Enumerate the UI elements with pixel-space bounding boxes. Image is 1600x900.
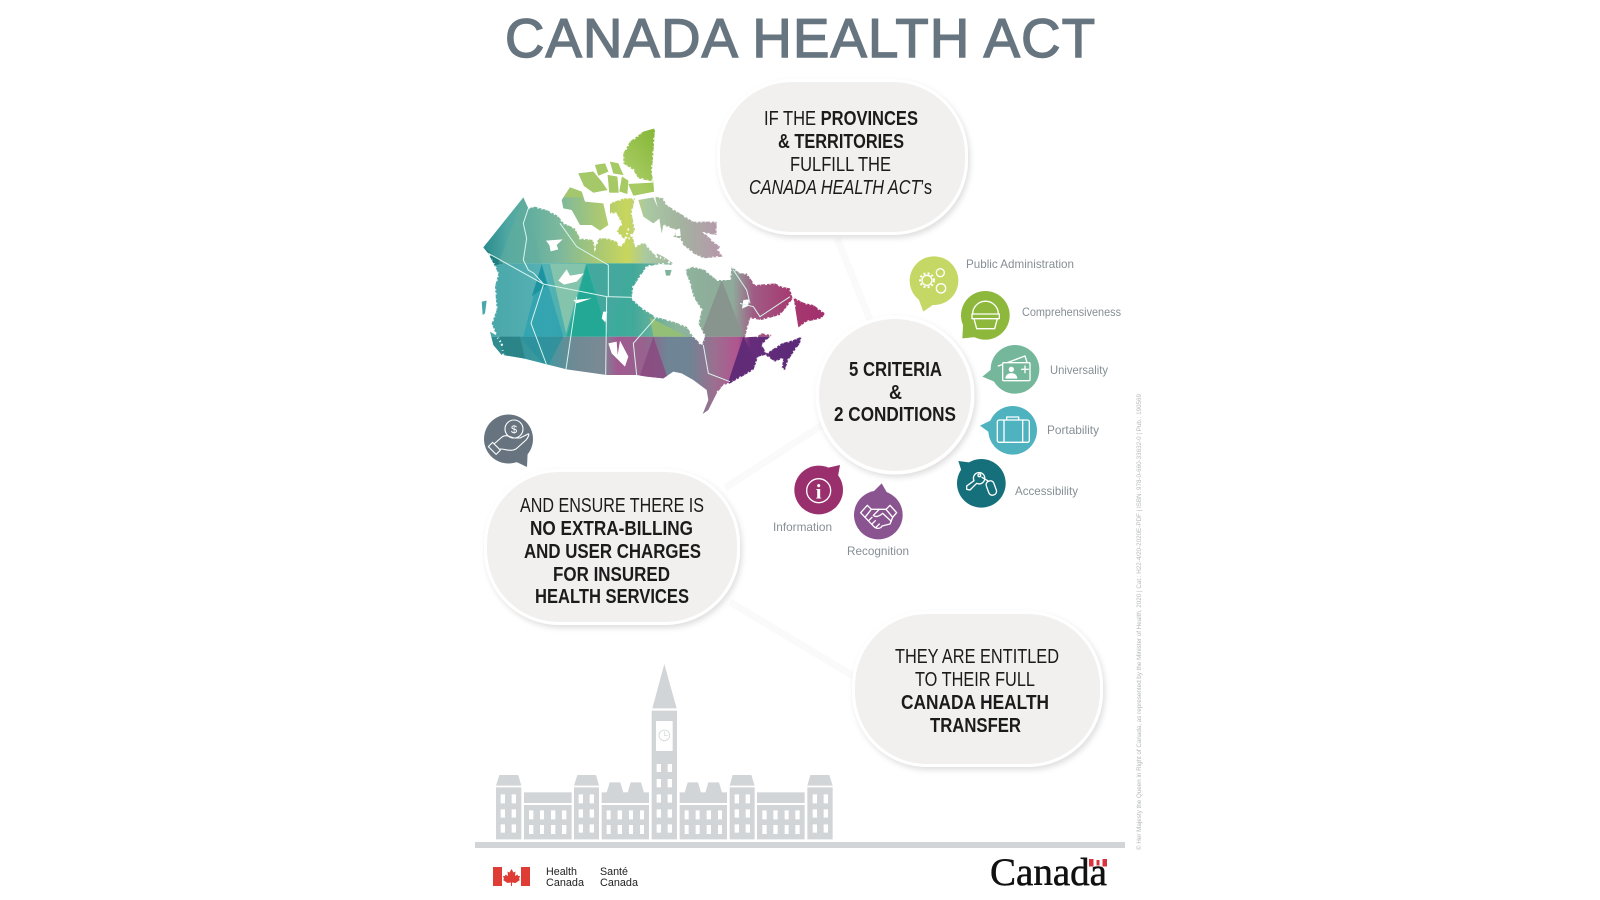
- left bubble text: AND USER CHARGES: [524, 541, 701, 563]
- icon: public administration gears: [910, 256, 958, 312]
- label: comprehensiveness: Comprehensiveness: [1022, 305, 1121, 319]
- centre circle: 5 criteria and 2 conditions: [816, 316, 974, 474]
- left bubble: [484, 469, 740, 625]
- left bubble text: HEALTH SERVICES: [535, 586, 689, 608]
- connector lines between bubbles: [725, 238, 870, 680]
- icon: portability suitcase: [980, 406, 1037, 455]
- Health Canada wordmark: [546, 866, 639, 889]
- centre text: 5 CRITERIA: [849, 359, 942, 381]
- Canada wordmark: Canada: [990, 851, 1107, 894]
- label: accessibility: Accessibility: [1015, 484, 1078, 498]
- Government of Canada flag symbol: [493, 867, 530, 886]
- copyright side text: © Her Majesty the Queen in Right of Canada, as represented by the Minister of Health, 2020 | Cat.: H22-4/20-2020E-PDF | ISBN: 978-0-660-33632-0 | Pub.: 190569: [1135, 394, 1143, 850]
- icon: accessibility keys: [957, 459, 1006, 508]
- Health Canada wordmark: Health: [546, 866, 577, 878]
- left bubble text: AND ENSURE THERE IS: [520, 495, 704, 517]
- central tower: [652, 664, 677, 839]
- top bubble text: IF THE PROVINCES: [764, 108, 918, 130]
- centre text: [834, 359, 956, 426]
- label: universality: Universality: [1050, 363, 1108, 377]
- top bubble text: FULFILL THE: [790, 154, 891, 176]
- title: CANADA HEALTH ACT: [505, 8, 1095, 69]
- right wing: [680, 775, 833, 839]
- Health Canada wordmark: Canada: [546, 877, 585, 889]
- top bubble text: CANADA HEALTH ACT’s: [749, 177, 932, 199]
- bottom right bubble text: TO THEIR FULL: [915, 669, 1035, 691]
- left wing: [496, 775, 649, 839]
- left bubble text: NO EXTRA-BILLING: [530, 518, 693, 540]
- criteria and condition icons: [794, 256, 1039, 539]
- bottom right bubble text: [895, 646, 1059, 737]
- left bubble text: FOR INSURED: [553, 564, 670, 586]
- bottom right bubble: [852, 611, 1103, 767]
- label: recognition: Recognition: [847, 544, 909, 558]
- bottom right bubble text: TRANSFER: [930, 715, 1021, 737]
- icon: information: i: [816, 481, 822, 503]
- icon: hand holding dollar coin: $: [511, 424, 517, 436]
- top bubble text: [749, 108, 932, 199]
- label: portability: Portability: [1047, 423, 1099, 437]
- icon: comprehensiveness basket: [961, 291, 1010, 340]
- bottom right bubble text: CANADA HEALTH: [901, 692, 1049, 714]
- map of Canada: [482, 128, 825, 414]
- ground line: [475, 842, 1125, 848]
- icon: hand holding dollar coin: [484, 414, 533, 467]
- lakes: [546, 228, 749, 367]
- provincial borders: [488, 208, 790, 382]
- centre text: &: [889, 382, 902, 404]
- icon: universality health cards: [982, 345, 1039, 394]
- Health Canada wordmark: Santé: [600, 866, 628, 878]
- left bubble text: [520, 495, 704, 608]
- bottom right bubble text: THEY ARE ENTITLED: [895, 646, 1059, 668]
- coastline notches: [488, 128, 825, 393]
- parliament building: [496, 664, 833, 839]
- top bubble: [717, 79, 968, 235]
- centre text: 2 CONDITIONS: [834, 404, 956, 426]
- icon: recognition handshake: [854, 483, 903, 539]
- label: public administration: Public Administration: [966, 257, 1074, 271]
- Health Canada wordmark: Canada: [600, 877, 639, 889]
- icon: information: [794, 465, 843, 514]
- label: information: Information: [773, 520, 832, 534]
- top bubble text: & TERRITORIES: [778, 131, 904, 153]
